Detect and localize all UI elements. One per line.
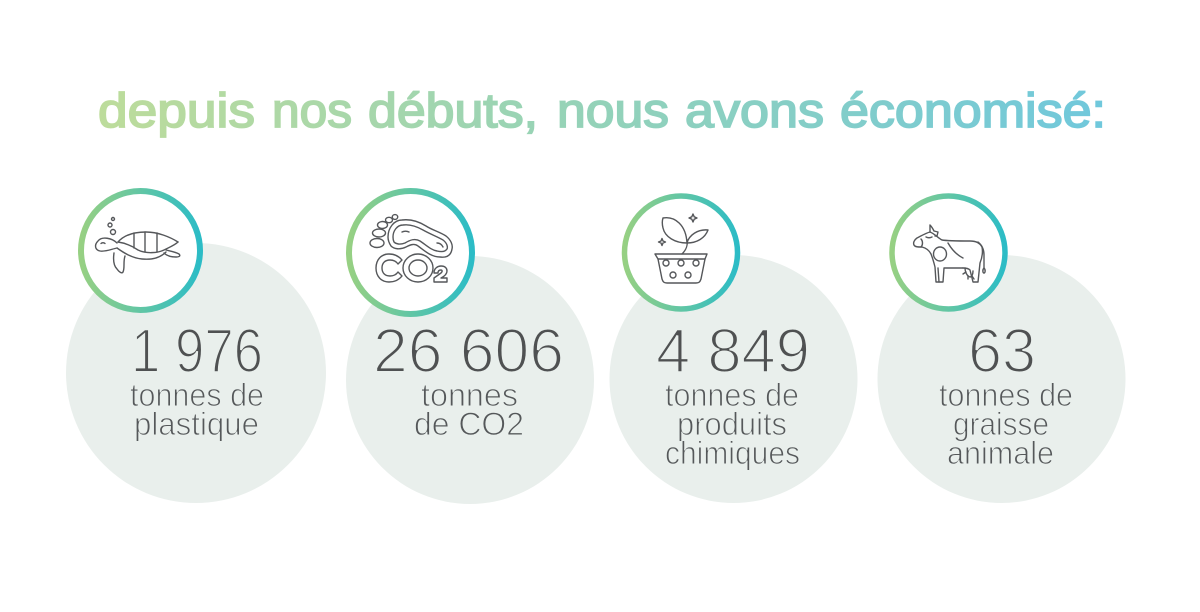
label: tonnes de plastique: plastique <box>134 406 259 442</box>
title: nos <box>272 85 352 138</box>
label: tonnes de plastique <box>130 377 264 442</box>
background circle: graisse animale <box>878 255 1126 503</box>
label: tonnes de produits chimiques <box>665 377 800 471</box>
icon ring: graisse animale <box>892 196 1005 309</box>
icon ring: plastique <box>81 191 200 310</box>
icon: plant in pot <box>655 214 708 283</box>
value: 1 976: 1 976 <box>131 317 263 386</box>
background circle: plastique <box>66 243 326 503</box>
label: tonnes de plastique: tonnes de <box>130 377 264 413</box>
title: économisé: <box>840 85 1106 138</box>
icon: cow <box>914 225 985 282</box>
label: tonnes de graisse animale: graisse <box>953 406 1049 442</box>
title <box>98 85 1106 138</box>
value: 26 606: 26 606 <box>373 317 564 386</box>
label: tonnes de CO2 <box>414 377 524 442</box>
panel: graisse animale <box>878 196 1126 503</box>
label: tonnes de graisse animale: animale <box>947 435 1054 471</box>
label: tonnes de CO2: tonnes <box>421 377 518 413</box>
label: tonnes de graisse animale: tonnes de <box>939 377 1073 413</box>
icon ring: CO2 <box>349 191 472 314</box>
icon ring: produits chimiques <box>624 196 738 309</box>
panel: CO2 <box>346 191 594 504</box>
label: tonnes de CO2: de CO2 <box>414 406 524 442</box>
panel: plastique <box>66 191 326 503</box>
icon: CO2 footprint <box>370 215 452 282</box>
label: tonnes de graisse animale <box>939 377 1073 471</box>
label: tonnes de produits chimiques: tonnes de <box>665 377 799 413</box>
value: 4 849: 4 849 <box>656 317 810 386</box>
value: 63: 63 <box>968 317 1036 386</box>
panel: produits chimiques <box>610 196 858 503</box>
label: tonnes de produits chimiques: chimiques <box>665 435 800 471</box>
icon: turtle <box>96 218 180 273</box>
title: nous <box>557 85 669 138</box>
label: tonnes de produits chimiques: produits <box>677 406 787 442</box>
title: débuts, <box>368 85 538 138</box>
background circle: CO2 <box>346 256 594 504</box>
background circle: produits chimiques <box>610 255 858 503</box>
title: avons <box>685 85 824 138</box>
title: depuis <box>98 85 255 138</box>
